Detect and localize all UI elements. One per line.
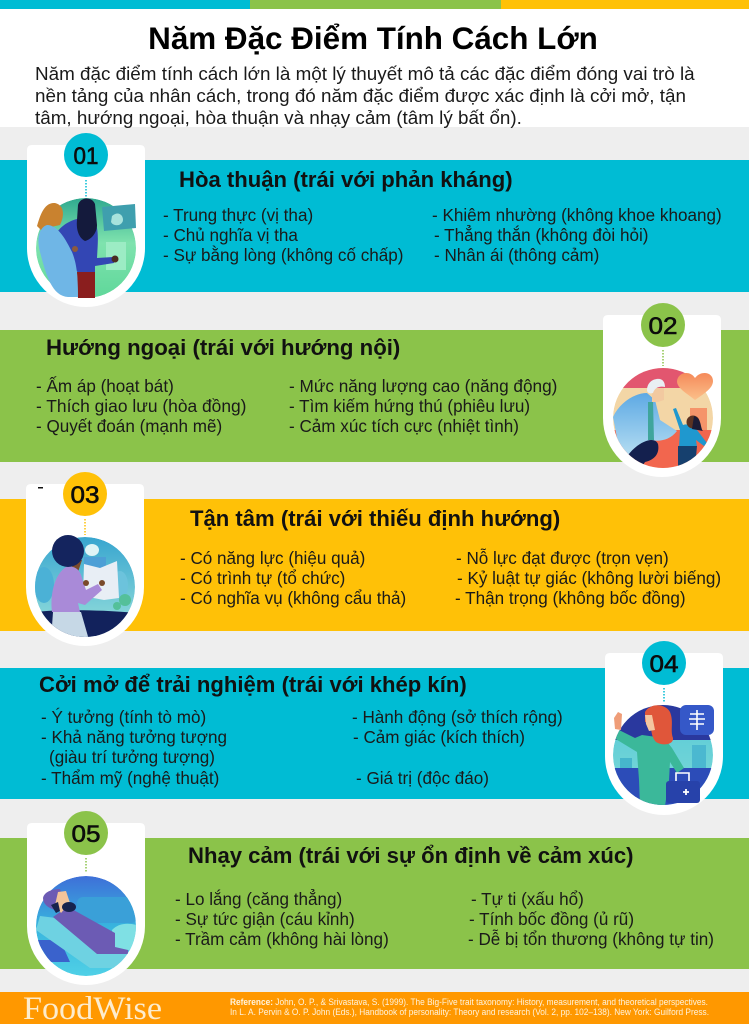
top colour bar <box>0 0 749 9</box>
number 04: 04 <box>650 651 678 678</box>
badge card 01 <box>27 145 145 307</box>
number 01: 01 <box>74 143 98 170</box>
traits 05: - Tự ti (xấu hổ) <box>471 890 584 909</box>
traits 05: - Tính bốc đồng (ủ rũ) <box>469 910 634 929</box>
icon: older man and child high five <box>613 368 713 468</box>
icon: person lying on chair <box>36 876 140 976</box>
traits 02: - Cảm xúc tích cực (nhiệt tình) <box>289 417 519 436</box>
number 02 <box>641 303 685 366</box>
traits 01: - Nhân ái (thông cảm) <box>434 246 599 265</box>
traits 02: - Quyết đoán (mạnh mẽ) <box>36 417 222 436</box>
intro paragraph: nền tảng của nhân cách, trong đó năm đặc điểm được xác định là cởi mở, tận <box>35 85 686 106</box>
traits 01: - Khiêm nhường (không khoe khoang) <box>432 206 722 225</box>
traits 03 <box>180 549 721 608</box>
traits 05: - Lo lắng (căng thẳng) <box>175 890 342 909</box>
title: Năm Đặc Điểm Tính Cách Lớn <box>148 21 598 56</box>
badge card 03 <box>26 484 144 646</box>
intro paragraph: tâm, hướng ngoại, hòa thuận và nhạy cảm (tâm lý bất ổn). <box>35 107 522 128</box>
traits 02: - Thích giao lưu (hòa đồng) <box>36 396 246 416</box>
traits 04: - Hành động (sở thích rộng) <box>352 708 563 727</box>
traits 01: - Chủ nghĩa vị tha <box>163 226 298 245</box>
band 02 <box>0 330 749 462</box>
badge card 04 <box>605 653 723 815</box>
badge card 05 <box>27 823 145 985</box>
traits 01: - Thẳng thắn (không đòi hỏi) <box>434 226 648 245</box>
traits 02: - Ấm áp (hoạt bát) <box>36 377 174 396</box>
traits 02: - Mức năng lượng cao (năng động) <box>289 376 557 396</box>
panel: agreeableness <box>0 133 749 307</box>
traits 04 <box>41 708 563 788</box>
traits 05: - Dễ bị tổn thương (không tự tin) <box>468 930 714 949</box>
icon: person reading <box>34 535 135 640</box>
traits 04: (giàu trí tưởng tượng) <box>49 748 215 767</box>
traits 04: - Cảm giác (kích thích) <box>353 728 525 747</box>
heading 03: Tận tâm (trái với thiếu định hướng) <box>190 506 560 531</box>
panel: conscientiousness <box>0 472 749 646</box>
heading 05: Nhạy cảm (trái với sự ổn định về cảm xúc) <box>188 843 634 868</box>
traits 02: - Tìm kiếm hứng thú (phiêu lưu) <box>289 397 530 416</box>
heading 01: Hòa thuận (trái với phản kháng) <box>179 167 513 192</box>
band 04 <box>0 668 749 799</box>
reference: Reference: John, O. P., & Srivastava, S. (1999). The Big-Five trait taxonomy: History, measurement, and theoretical perspectives. <box>230 997 708 1007</box>
number 04 <box>642 641 686 703</box>
traits 05 <box>175 890 714 949</box>
intro paragraph <box>35 63 695 128</box>
traits 04: - Thẩm mỹ (nghệ thuật) <box>41 769 219 788</box>
panel: neuroticism <box>0 811 749 985</box>
traits 04: - Giá trị (độc đáo) <box>356 769 489 788</box>
icon: pregnant woman and doctor <box>36 198 136 298</box>
icon: doctor with medical bag <box>613 705 714 805</box>
panel: openness <box>0 641 749 815</box>
panel: extraversion <box>0 303 749 477</box>
traits 05: - Sự tức giận (cáu kỉnh) <box>175 910 355 929</box>
traits 04: - Khả năng tưởng tượng <box>41 728 227 747</box>
intro paragraph: Năm đặc điểm tính cách lớn là một lý thuyết mô tả các đặc điểm đóng vai trò là <box>35 63 695 84</box>
heading 04: Cởi mở để trải nghiệm (trái với khép kín) <box>39 672 467 697</box>
heading 02: Hướng ngoại (trái với hướng nội) <box>46 335 400 360</box>
number 01 <box>64 133 108 197</box>
traits 05: - Trầm cảm (không hài lòng) <box>175 930 389 949</box>
traits 03: - Có năng lực (hiệu quả) <box>180 549 365 568</box>
traits 03: - Thận trọng (không bốc đồng) <box>455 589 686 608</box>
reference <box>230 997 709 1017</box>
number 02: 02 <box>648 313 678 340</box>
number 05 <box>64 811 108 873</box>
traits 02 <box>36 376 557 436</box>
number 03: 03 <box>70 482 100 509</box>
traits 01: - Sự bằng lòng (không cố chấp) <box>163 246 403 265</box>
traits 04: - Ý tưởng (tính tò mò) <box>41 708 206 727</box>
traits 03: - Có trình tự (tổ chức) <box>180 569 345 588</box>
reference: In L. A. Pervin & O. P. John (Eds.), Handbook of personality: Theory and research (Vol. 2, pp. 102–138). New York: Guilford Press. <box>230 1007 709 1017</box>
traits 03: - Nỗ lực đạt được (trọn vẹn) <box>456 549 669 568</box>
number 03 <box>63 472 107 535</box>
traits 01: - Trung thực (vị tha) <box>163 206 313 225</box>
band 05 <box>0 838 749 969</box>
traits 01 <box>163 206 722 265</box>
band 01 <box>0 160 749 292</box>
band 03 <box>0 499 749 631</box>
number 05: 05 <box>72 821 100 848</box>
traits 03: - Kỷ luật tự giác (không lười biếng) <box>457 569 721 588</box>
traits 03: - Có nghĩa vụ (không cẩu thả) <box>180 589 406 608</box>
footer bar <box>0 991 749 1024</box>
badge card 02 <box>603 315 721 477</box>
